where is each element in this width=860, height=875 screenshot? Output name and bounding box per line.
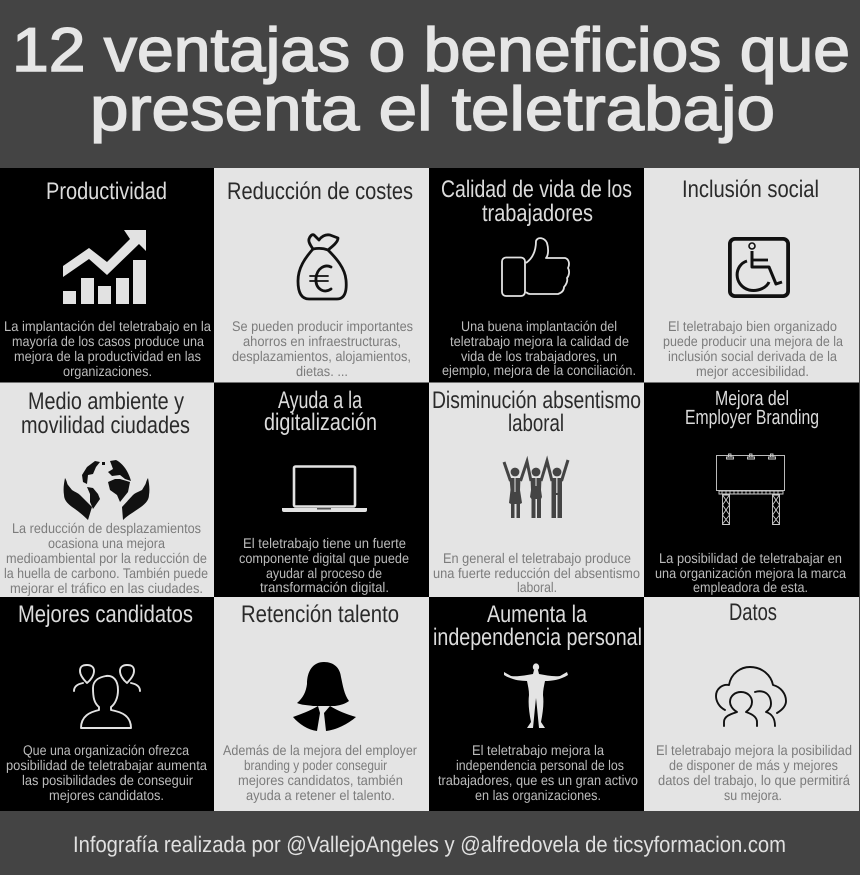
heading: Ayuda a la digitalización: Ayuda a la bbox=[278, 387, 362, 414]
body text bbox=[655, 550, 846, 595]
body text: La reducción de desplazamientos bbox=[12, 520, 201, 536]
heading: Ayuda a la digitalización bbox=[264, 387, 377, 436]
body text: medioambiental por la reducción de bbox=[6, 550, 207, 566]
body text: laboral. bbox=[517, 579, 557, 595]
heading: Calidad de vida bbox=[441, 176, 632, 227]
heading: Independencia personal: independencia personal bbox=[433, 624, 642, 651]
body text bbox=[223, 742, 417, 803]
body text: ayudar al proceso de bbox=[266, 565, 382, 581]
body text: independencia personal de los bbox=[456, 757, 624, 773]
body text: ayuda a retener el talento. bbox=[246, 787, 395, 803]
body text bbox=[656, 742, 852, 803]
body text: componente digital que puede bbox=[239, 550, 409, 566]
body text: Una buena implantación del bbox=[461, 318, 617, 334]
panel: Datos bbox=[644, 597, 859, 811]
title: 12 ventajas o beneficios que bbox=[12, 16, 850, 85]
heading: Calidad de vida: trabajadores bbox=[482, 200, 593, 227]
body text: las posibilidades de conseguir bbox=[22, 772, 193, 788]
body text: ahorros en infraestructuras, bbox=[243, 333, 401, 349]
body text: El teletrabajo bien organizado bbox=[668, 318, 837, 334]
body text bbox=[663, 318, 843, 379]
icon: woman silhouette bbox=[293, 662, 356, 731]
body text bbox=[442, 318, 636, 378]
heading: Productividad: Productividad bbox=[46, 178, 167, 205]
panel: Productividad bbox=[0, 168, 214, 382]
heading: Mejores candidatos: Mejores candidatos bbox=[18, 601, 193, 628]
body text: la huella de carbono. También puede bbox=[4, 565, 208, 581]
icon: growth chart bbox=[63, 230, 146, 304]
body text: mejores candidatos, también bbox=[238, 772, 403, 788]
body text: transformación digital. bbox=[260, 579, 389, 595]
body text bbox=[232, 318, 413, 379]
body text: El teletrabajo mejora la bbox=[472, 742, 604, 758]
body text: Se pueden producir importantes bbox=[232, 318, 413, 334]
heading: Ayuda a la digitalización: digitalización bbox=[264, 409, 377, 436]
heading: Independencia personal bbox=[433, 601, 642, 651]
icon: laptop bbox=[282, 466, 367, 512]
body text bbox=[4, 520, 208, 596]
heading: Independencia personal: Aumenta la bbox=[487, 601, 588, 628]
heading: Disminución absentismo: Disminución absentismo bbox=[432, 387, 641, 414]
heading: Reducción de costes: Reducción de costes bbox=[227, 178, 413, 205]
heading: Disminución absentismo: laboral bbox=[508, 410, 564, 437]
panel: Ayuda a la digitalización bbox=[214, 382, 429, 597]
heading: Medio ambiente: Medio ambiente y bbox=[28, 388, 184, 415]
panel: Reducción de costes bbox=[214, 168, 429, 382]
body text: ocasiona una mejora bbox=[48, 535, 165, 551]
heading: Calidad de vida: Calidad de vida de los bbox=[441, 176, 632, 203]
body text: branding y poder conseguir bbox=[244, 757, 387, 773]
heading: Employer Branding bbox=[685, 387, 819, 429]
body text: mejor accesibilidad. bbox=[696, 363, 809, 379]
footer credit: Infografía realizada por @VallejoAngeles y @alfredovela de ticsyformacion.com bbox=[73, 832, 786, 857]
body text bbox=[239, 535, 409, 595]
panel: Disminución absentismo bbox=[429, 382, 644, 597]
body text: mejorar el tráfico en las ciudades. bbox=[10, 580, 203, 596]
body text: inclusión social derivada de la bbox=[668, 348, 837, 364]
body text: datos del trabajo, lo que permitirá bbox=[658, 772, 850, 788]
body text: empleadora de esta. bbox=[693, 579, 808, 595]
body text: en las organizaciones. bbox=[475, 787, 601, 803]
body text: mayoría de los casos produce una bbox=[12, 333, 204, 349]
body text: trabajadores, que es un gran activo bbox=[438, 772, 638, 788]
heading: Datos: Datos bbox=[729, 599, 777, 626]
heading: Disminución absentismo bbox=[432, 387, 641, 437]
heading: Inclusión social: Inclusión social bbox=[682, 176, 819, 203]
heading: Medio ambiente: movilidad ciudades bbox=[21, 412, 190, 439]
icon: three people raising arms bbox=[504, 460, 568, 518]
heading: Medio ambiente bbox=[21, 388, 190, 439]
heading: Employer Branding: Employer Branding bbox=[685, 406, 819, 429]
body text: En general el teletrabajo produce bbox=[443, 550, 631, 566]
icon: wheelchair bbox=[730, 239, 788, 296]
body text: posibilidad de teletrabajar aumenta bbox=[6, 757, 207, 773]
body text: teletrabajo mejora la calidad de bbox=[450, 333, 629, 349]
panel: Mejores candidatos bbox=[0, 597, 214, 811]
panel: Calidad de vida bbox=[429, 168, 644, 382]
panel: Independencia personal bbox=[429, 597, 644, 811]
body text: La implantación del teletrabajo en la bbox=[4, 318, 211, 334]
panel: Inclusión social bbox=[644, 168, 859, 382]
body text bbox=[6, 742, 207, 803]
icon: candidates bbox=[74, 665, 140, 728]
icon: people and cloud bbox=[716, 667, 786, 726]
panel: Employer Branding bbox=[644, 382, 859, 597]
icon: money bag with euro bbox=[298, 235, 346, 299]
body text: mejora de la productividad en las bbox=[14, 348, 201, 364]
body text: dietas. ... bbox=[296, 363, 348, 379]
body text: Además de la mejora del employer bbox=[223, 742, 417, 758]
body text: su mejora. bbox=[724, 787, 782, 803]
body text: una organización mejora la marca bbox=[655, 565, 846, 581]
icon: human figure bbox=[504, 663, 568, 728]
body text: El teletrabajo tiene un fuerte bbox=[243, 535, 406, 551]
title: presenta el teletrabajo bbox=[90, 75, 775, 144]
icon: thumbs up bbox=[502, 238, 569, 296]
body text: mejores candidatos. bbox=[49, 787, 164, 803]
body text: ejemplo, mejora de la conciliación. bbox=[442, 362, 636, 378]
panel: Medio ambiente bbox=[0, 382, 214, 597]
panel: Retención talento bbox=[214, 597, 429, 811]
body text: Que una organización ofrezca bbox=[23, 742, 189, 758]
body text: La posibilidad de teletrabajar en bbox=[659, 550, 842, 566]
body text bbox=[438, 742, 638, 803]
body text: vida de los trabajadores, un bbox=[461, 348, 617, 364]
heading: Employer Branding: Mejora del bbox=[715, 387, 789, 410]
heading: Retención talento: Retención talento bbox=[241, 601, 399, 628]
title bbox=[12, 16, 850, 144]
icon: billboard bbox=[716, 454, 784, 524]
body text bbox=[4, 318, 211, 379]
icon: globe in hands bbox=[64, 460, 149, 520]
body text: una fuerte reducción del absentismo bbox=[433, 565, 640, 581]
body text: organizaciones. bbox=[63, 363, 152, 379]
body text: de disponer de más y mejores bbox=[669, 757, 838, 773]
body text bbox=[433, 550, 640, 595]
body text: desplazamientos, alojamientos, bbox=[232, 348, 411, 364]
body text: puede producir una mejora de la bbox=[663, 333, 843, 349]
